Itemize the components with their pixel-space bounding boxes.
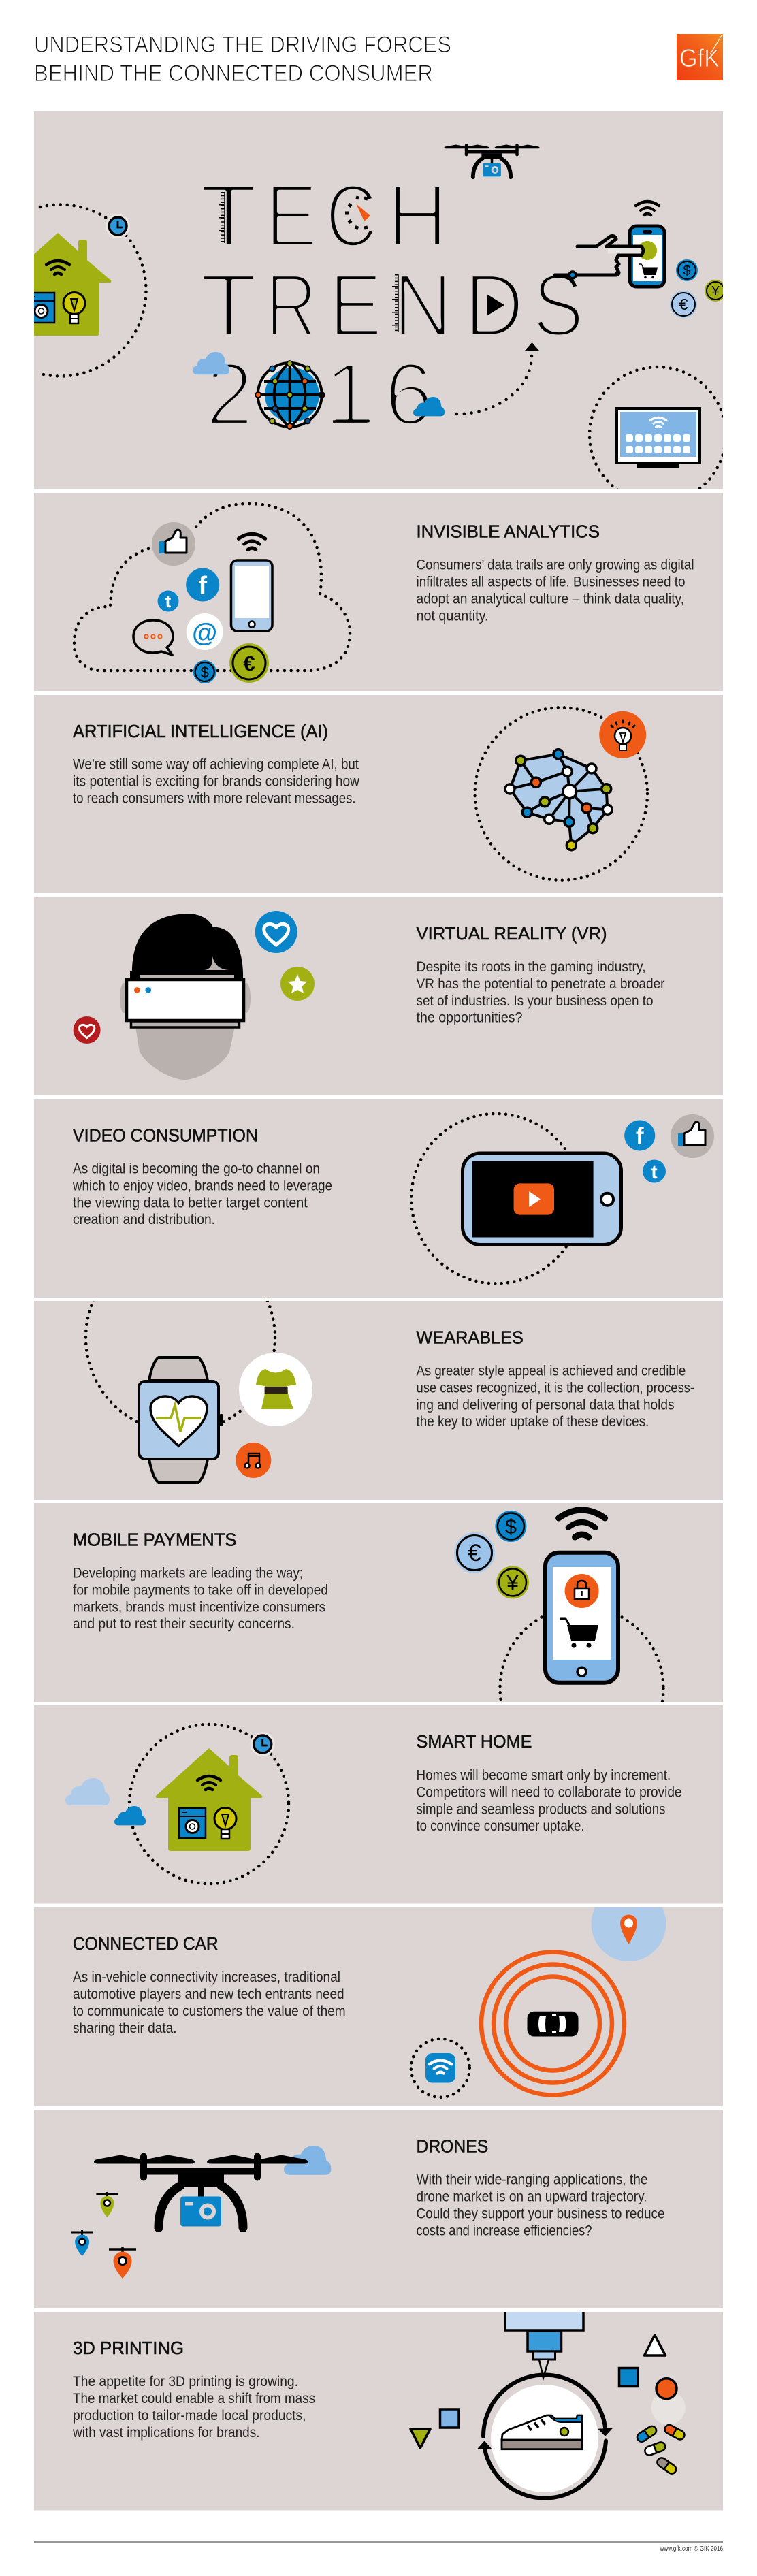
dotted circle — [129, 1724, 289, 1884]
body text: for mobile payments to take off in developed — [73, 1582, 328, 1598]
icon: wifi — [559, 1510, 605, 1537]
body text — [417, 1363, 694, 1430]
main title: Tech Trends 2016: E — [265, 165, 318, 265]
body text: production to tailor-made local products, — [73, 2408, 306, 2424]
globe — [255, 361, 325, 429]
body text: drone market is on an upward trajectory. — [417, 2189, 647, 2205]
main title: Tech Trends 2016: 1 — [324, 344, 374, 444]
main title: Tech Trends 2016: T — [200, 255, 257, 355]
icon: facebook: f — [198, 572, 207, 600]
heading: CONNECTED CAR — [73, 1933, 218, 1954]
coins — [670, 259, 726, 318]
play triangle in D — [487, 294, 504, 316]
icon: clock — [106, 214, 130, 238]
icon: facebook — [186, 568, 219, 602]
icon: phone — [231, 534, 272, 631]
heading: MOBILE PAYMENTS — [73, 1530, 236, 1550]
body text — [72, 2374, 315, 2441]
panel: drones — [34, 2110, 723, 2308]
icon: t — [643, 1160, 666, 1183]
body text: to reach consumers with more relevant messages. — [73, 791, 356, 806]
body text: With their wide-ranging applications, the — [417, 2172, 648, 2188]
icon: sneaker in circle — [477, 2374, 613, 2498]
icon: brain network — [505, 750, 612, 850]
body text: adopt an analytical culture – think data quality, — [417, 591, 684, 607]
panel: artificial intelligence — [34, 695, 723, 893]
icon: location pin — [591, 1907, 666, 1961]
logo: GfK — [677, 34, 723, 80]
body text: the opportunities? — [417, 1010, 523, 1026]
body text — [417, 959, 664, 1026]
heading: VIDEO CONSUMPTION — [73, 1125, 258, 1146]
heading: DRONES — [417, 2136, 488, 2156]
body text: its potential is exciting for brands considering how — [73, 774, 360, 790]
body text — [73, 1969, 346, 2036]
main title: Tech Trends 2016 — [200, 165, 584, 444]
body text: to convince consumer uptake. — [417, 1818, 584, 1834]
main title: Tech Trends 2016: 0 — [267, 344, 315, 444]
icon: drone — [444, 144, 540, 177]
coin: dollar — [495, 1511, 526, 1542]
icon: phone with lock and cart — [545, 1553, 618, 1683]
icon: head with VR headset — [120, 914, 251, 1080]
body text: sharing their data. — [73, 2020, 177, 2036]
heading: INVISIBLE ANALYTICS — [417, 521, 600, 542]
heading: WEARABLES — [417, 1327, 524, 1347]
dotted circle — [475, 707, 647, 880]
icon: blue heart — [255, 911, 297, 953]
main title: Tech Trends 2016: 2 — [206, 344, 253, 444]
pills — [635, 2424, 686, 2475]
body text: the key to wider uptake of these devices. — [417, 1414, 649, 1430]
panel: 3D printing — [34, 2312, 723, 2511]
icon: phone with cart — [577, 202, 664, 287]
panel: Tech Trends 2016 hero — [5, 111, 726, 503]
main title: Tech Trends 2016: N — [393, 255, 453, 355]
footer credit: www.gfk.com © GfK 2016 — [660, 2545, 723, 2553]
coin: dollar — [193, 660, 216, 683]
body text: which to enjoy video, brands need to leverage — [72, 1178, 332, 1193]
body text: Despite its roots in the gaming industry, — [417, 959, 645, 975]
coin: euro: € — [243, 651, 255, 675]
icon: at sign — [187, 613, 223, 650]
heading: VIRTUAL REALITY (VR) — [417, 923, 607, 944]
icon: at sign: @ — [192, 619, 217, 647]
icon: thumbs up — [671, 1114, 714, 1158]
body text: Consumers’ data trails are only growing as digital — [417, 558, 694, 573]
cloud — [284, 2146, 332, 2175]
mini drone: orange — [109, 2247, 136, 2279]
hand with wire — [555, 272, 619, 278]
heading: 3D PRINTING — [73, 2338, 184, 2358]
ruler on T — [221, 192, 225, 243]
main title: Tech Trends 2016: D — [464, 255, 524, 355]
body text — [417, 2172, 664, 2239]
body text: the viewing data to better target content — [73, 1195, 308, 1210]
header title: BEHIND THE CONNECTED CONSUMER — [34, 61, 433, 86]
mini drone: blue — [71, 2230, 93, 2256]
dotted cloud outline — [74, 504, 350, 671]
body text: Competitors will need to collaborate to provide — [417, 1784, 682, 1800]
body text: use cases recognized, it is the collection, process- — [417, 1380, 694, 1396]
body text: As greater style appeal is achieved and credible — [417, 1363, 686, 1379]
coins: € — [679, 295, 688, 313]
dotted circle — [498, 1615, 665, 1702]
icon: t — [158, 591, 178, 611]
icon: green star — [280, 967, 315, 1001]
icon: wifi tile — [411, 2039, 470, 2097]
body text: and put to rest their security concerns. — [73, 1616, 295, 1632]
heading: ARTIFICIAL INTELLIGENCE (AI) — [73, 721, 328, 741]
main title: Tech Trends 2016: R — [265, 255, 317, 355]
body text — [72, 1161, 332, 1227]
body text: infiltrates all aspects of life. Businesses need to — [417, 575, 685, 590]
coin: yen — [496, 1566, 529, 1598]
panel: invisible analytics — [34, 493, 723, 691]
icon: house — [156, 1748, 262, 1851]
body text: We’re still some way off achieving complete AI, but — [73, 757, 359, 773]
body text: Homes will become smart only by increment. — [417, 1767, 671, 1783]
coin: euro — [229, 643, 269, 683]
header title: UNDERSTANDING THE DRIVING FORCES — [34, 32, 451, 58]
main title: Tech Trends 2016: E — [329, 255, 383, 355]
body text — [73, 757, 360, 806]
panel: smart home — [34, 1705, 723, 1903]
dotted circle — [411, 1114, 581, 1283]
icon: red heart — [74, 1016, 101, 1044]
panel: virtual reality — [34, 897, 723, 1095]
panel: video consumption — [34, 1099, 723, 1298]
body text: markets, brands must incentivize consumers — [73, 1599, 325, 1615]
coin: yen: ¥ — [506, 1571, 519, 1595]
body text: not quantity. — [417, 608, 489, 624]
coin: dollar: $ — [505, 1515, 517, 1539]
ruler on N — [395, 274, 398, 332]
body text: The market could enable a shift from mass — [73, 2391, 315, 2406]
body text: VR has the potential to penetrate a broader — [417, 976, 664, 992]
main title: Tech Trends 2016: 6 — [384, 344, 434, 444]
shapes: raw materials — [410, 2335, 686, 2448]
main title: Tech Trends 2016: T — [200, 165, 257, 265]
icon: t: t — [165, 591, 172, 611]
panel: connected car — [34, 1886, 723, 2106]
body text: The appetite for 3D printing is growing. — [73, 2374, 298, 2389]
icon: car — [527, 2012, 579, 2037]
body text: simple and seamless products and solutions — [417, 1801, 665, 1817]
icon: dress on white disc — [239, 1353, 312, 1426]
coins: ¥ — [711, 284, 720, 299]
icon: printer head — [505, 2312, 583, 2378]
dotted circle — [84, 1301, 276, 1423]
body text: Developing markets are leading the way; — [73, 1565, 303, 1581]
footer rule — [34, 2542, 723, 2543]
coin: euro — [454, 1532, 495, 1573]
mini drone: green — [96, 2192, 118, 2217]
main title: Tech Trends 2016: S — [532, 255, 584, 355]
header title — [34, 32, 451, 86]
main title: Tech Trends 2016: H — [387, 165, 448, 265]
body text — [417, 558, 694, 624]
coin: euro: € — [468, 1540, 481, 1566]
base of numeral 1 — [336, 419, 368, 422]
icon: chat bubble — [133, 620, 173, 655]
dial inside C — [345, 197, 370, 229]
main title: Tech Trends 2016: C — [325, 165, 377, 265]
icon: clock — [251, 1732, 275, 1756]
coins: $ — [683, 263, 691, 278]
body text: costs and increase efficiencies? — [417, 2223, 592, 2239]
panel: mobile payments — [34, 1503, 723, 1702]
body text — [73, 1565, 328, 1632]
icon: landscape phone with play button — [463, 1153, 621, 1244]
dotted arrow — [455, 342, 539, 414]
panel: wearables — [34, 1301, 723, 1500]
body text — [417, 1767, 682, 1834]
heading: SMART HOME — [417, 1731, 532, 1752]
clouds near 2016 — [193, 352, 445, 416]
coin: dollar: $ — [201, 664, 209, 681]
body text: automotive players and new tech entrants need — [73, 1986, 344, 2002]
icon: large drone — [94, 2155, 308, 2227]
body text: set of industries. Is your business open to — [417, 993, 654, 1009]
body text: As in-vehicle connectivity increases, traditional — [73, 1969, 340, 1985]
icon: facebook — [624, 1121, 655, 1150]
icon: smartwatch — [139, 1357, 223, 1483]
icon: music note — [236, 1443, 271, 1478]
icon: t: t — [651, 1161, 658, 1182]
body text: with vast implications for brands. — [72, 2425, 260, 2441]
clouds — [65, 1778, 146, 1825]
logo: GfK: GfK — [679, 44, 720, 72]
concentric signal rings — [481, 1952, 624, 2095]
icon: thumbs up — [152, 522, 195, 566]
body text: Could they support your business to reduce — [417, 2206, 664, 2222]
icon: facebook: f — [636, 1123, 644, 1150]
body text: creation and distribution. — [73, 1212, 215, 1227]
icon: tablet in dotted circle — [590, 367, 726, 503]
body text: As digital is becoming the go-to channel on — [73, 1161, 320, 1176]
dotted arc around house — [40, 204, 146, 376]
body text: to communicate to customers the value of them — [73, 2003, 346, 2019]
icon: house — [34, 233, 112, 336]
body text: ing and delivering of personal data that holds — [417, 1397, 674, 1413]
icon: lightbulb badge — [599, 711, 646, 758]
